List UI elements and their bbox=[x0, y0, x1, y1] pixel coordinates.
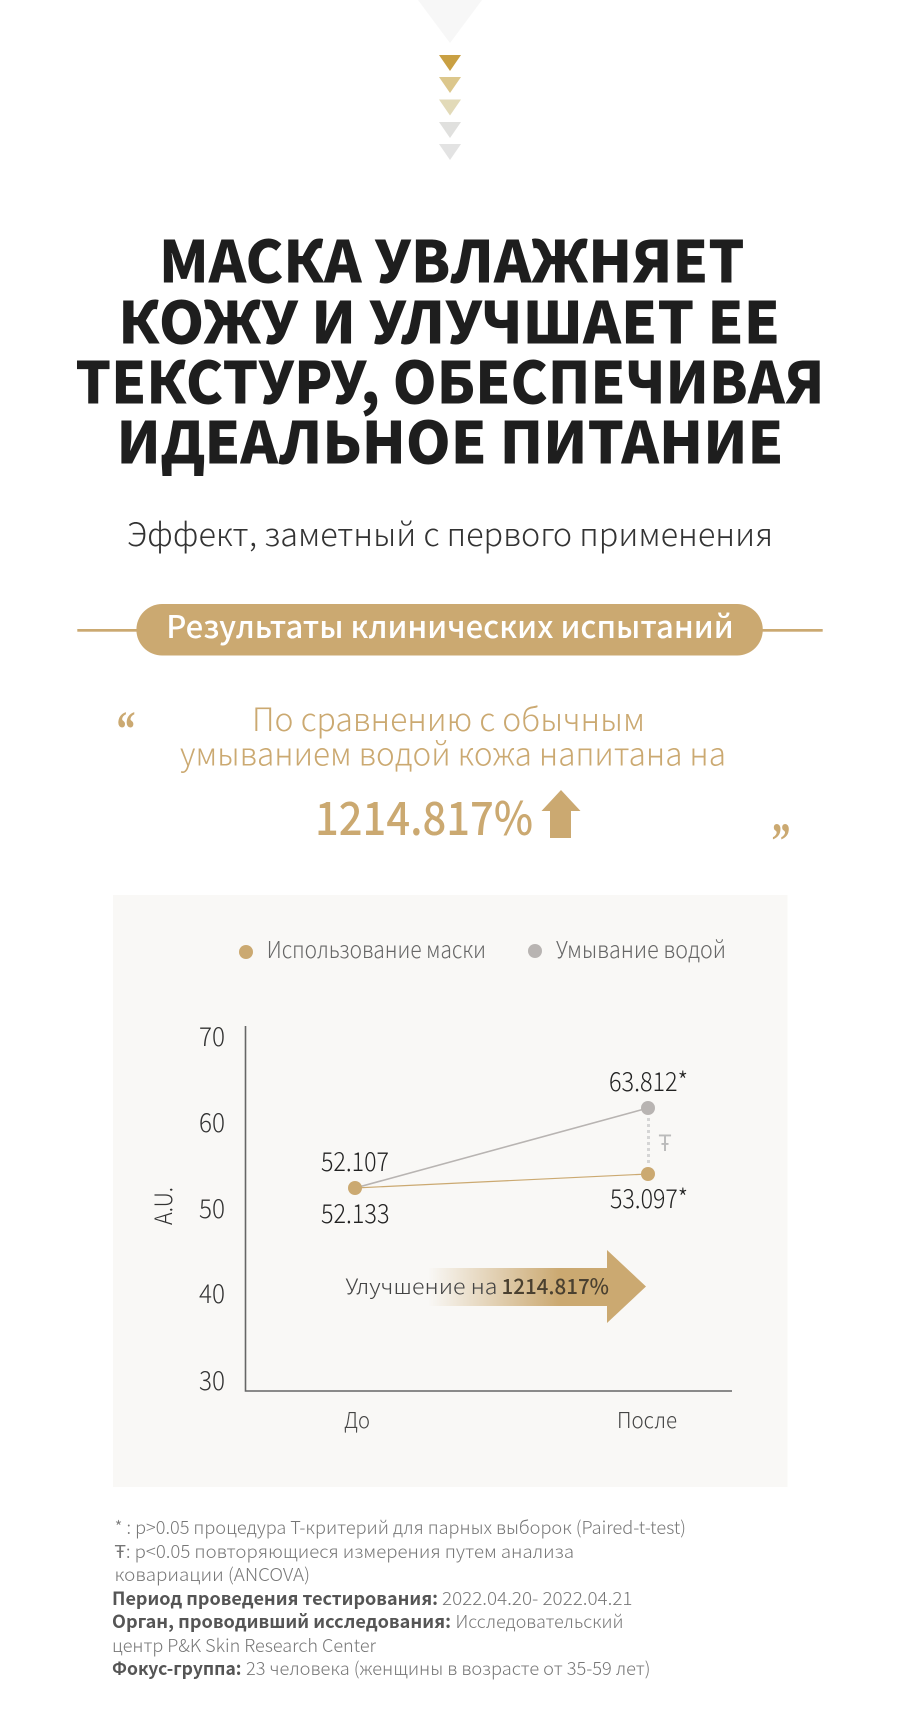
footnotes: Исследовательский bbox=[456, 1608, 624, 1634]
subtitle: Эффект, заметный с первого применения bbox=[127, 510, 773, 556]
y axis labels: 60 bbox=[199, 1103, 225, 1140]
footnotes: Фокус-группа: bbox=[112, 1655, 242, 1681]
title bbox=[75, 216, 824, 480]
title: КОЖУ И УЛУЧШАЕТ ЕЕ bbox=[118, 276, 780, 360]
callout: comparison statement bbox=[116, 695, 790, 870]
panel: chart bbox=[113, 895, 788, 1487]
data labels: 63.812* bbox=[609, 1062, 688, 1099]
significance marker: Ŧ bbox=[658, 1132, 671, 1157]
icon: closing quote: ” bbox=[772, 814, 790, 870]
y axis labels: 50 bbox=[199, 1189, 225, 1226]
footnotes: Ŧ: p<0.05 повторяющиеся измерения путем анализа bbox=[114, 1538, 574, 1564]
section heading pill: Результаты клинических испытаний bbox=[166, 602, 734, 647]
title: ИДЕАЛЬНОЕ ПИТАНИЕ bbox=[116, 396, 784, 480]
icon: opening quote: “ bbox=[116, 702, 136, 758]
chart axes bbox=[246, 1026, 732, 1391]
data labels: 52.133 bbox=[321, 1194, 390, 1231]
legend: Умывание водой bbox=[556, 931, 726, 965]
section heading pill bbox=[77, 602, 823, 656]
title: МАСКА УВЛАЖНЯЕТ bbox=[159, 216, 745, 300]
data series: water wash bbox=[355, 1101, 655, 1188]
icon: up arrow bbox=[542, 790, 580, 838]
footnotes: ковариации (ANCOVA) bbox=[114, 1561, 310, 1587]
footnotes: Орган, проводивший исследования: bbox=[112, 1608, 451, 1634]
y axis labels: 30 bbox=[199, 1361, 225, 1398]
legend: Использование маски bbox=[267, 931, 486, 965]
icon: top pale triangle bbox=[418, 0, 482, 43]
x axis labels: До bbox=[344, 1403, 370, 1435]
footnotes: центр P&K Skin Research Center bbox=[112, 1632, 377, 1658]
legend bbox=[239, 931, 726, 965]
callout: comparison statement: 1214.817% bbox=[315, 783, 533, 849]
y axis title: A.U. bbox=[144, 1187, 179, 1225]
footnotes: * : p>0.05 процедура Т-критерий для парных выборок (Paired-t-test) bbox=[114, 1514, 686, 1540]
icon: descending triangles bbox=[439, 55, 461, 160]
x axis labels bbox=[344, 1403, 677, 1435]
x axis labels: После bbox=[617, 1403, 677, 1435]
data labels: 52.107 bbox=[321, 1142, 389, 1179]
y axis labels: 40 bbox=[199, 1274, 225, 1311]
y axis labels bbox=[199, 1017, 225, 1398]
footnotes bbox=[112, 1514, 686, 1681]
arrow: improvement bbox=[346, 1250, 646, 1323]
callout: comparison statement: умыванием водой кожа напитана на bbox=[180, 730, 726, 776]
data series: mask bbox=[348, 1167, 655, 1195]
data labels: 53.097* bbox=[610, 1179, 688, 1216]
footnotes: Период проведения тестирования: bbox=[112, 1585, 438, 1611]
arrow: improvement: 1214.817% bbox=[502, 1271, 609, 1301]
y axis labels: 70 bbox=[199, 1017, 225, 1054]
significance marker bbox=[648, 1118, 671, 1166]
footnotes: 23 человека (женщины в возрасте от 35-59 лет) bbox=[246, 1655, 650, 1681]
data labels bbox=[321, 1062, 688, 1231]
arrow: improvement: Улучшение на bbox=[346, 1271, 498, 1301]
callout: comparison statement: По сравнению с обычным bbox=[252, 695, 645, 741]
footnotes: 2022.04.20- 2022.04.21 bbox=[442, 1585, 632, 1611]
title: ТЕКСТУРУ, ОБЕСПЕЧИВАЯ bbox=[75, 336, 824, 420]
